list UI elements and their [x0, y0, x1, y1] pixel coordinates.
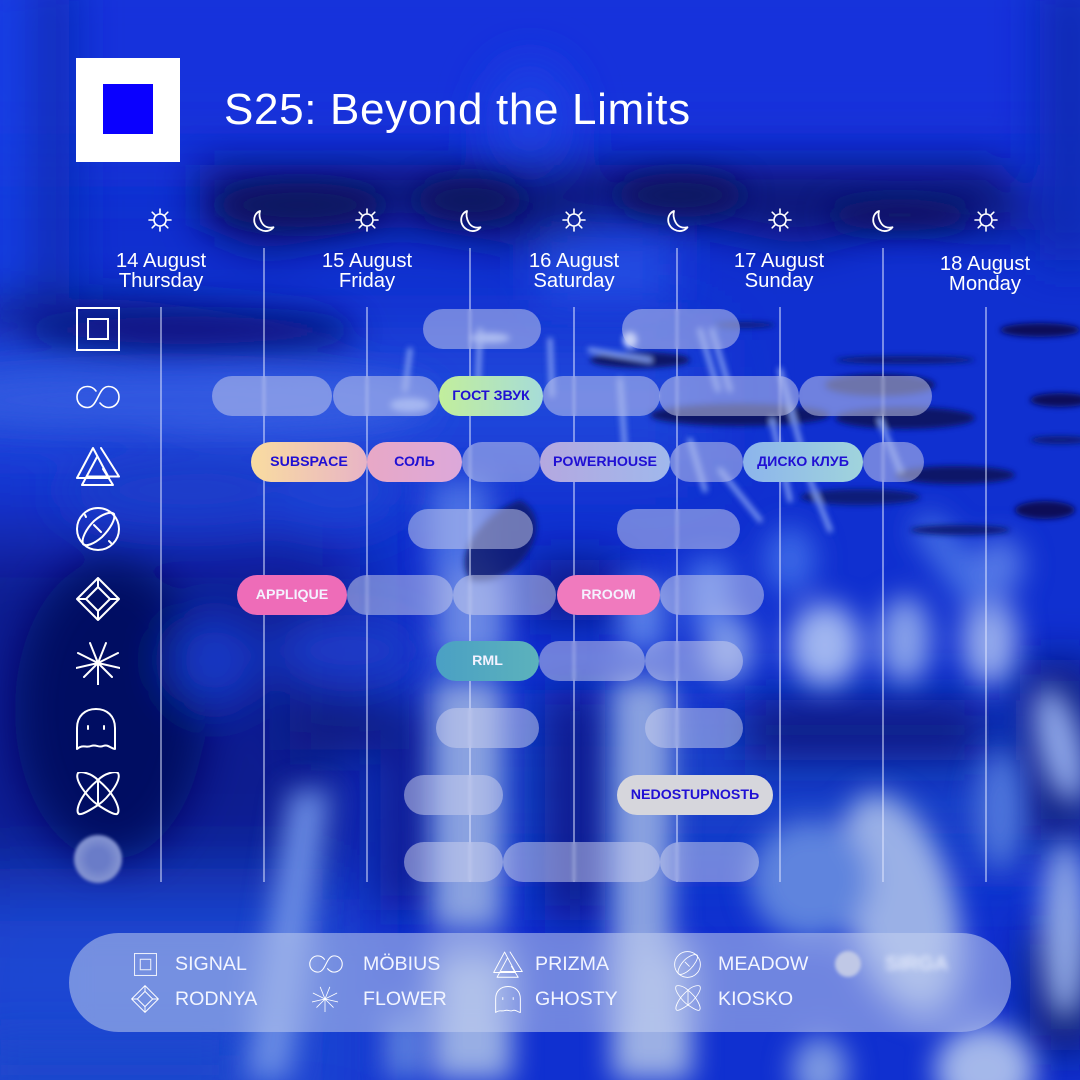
- session: RML: RML: [472, 653, 503, 669]
- legend label: RODNYA: RODNYA: [175, 988, 257, 1010]
- date: 17 August Sunday: 17 August: [734, 250, 824, 272]
- session: APPLIQUE: APPLIQUE: [256, 587, 328, 603]
- row 1 sessions: Signal: [423, 309, 740, 349]
- empty session: [408, 509, 533, 549]
- legend icon: Meadow: [674, 951, 701, 978]
- day and night icons row: [148, 208, 998, 232]
- title: S25: Beyond the Limits: [224, 85, 691, 134]
- icon: sun: [562, 208, 586, 232]
- row 9 sessions: blurred stage: [404, 842, 759, 882]
- legend label: blurred name: SIRGA: [885, 953, 948, 975]
- row icon: Kiosko: [76, 772, 120, 816]
- date: 18 August Monday: 18 August: [940, 253, 1030, 275]
- session: APPLIQUE: [237, 575, 347, 615]
- legend icon: Flower: [312, 986, 338, 1012]
- empty session: [404, 842, 503, 882]
- session: NEDOSTUPNOSTЬ: [617, 775, 773, 815]
- legend icon: Ghosty: [495, 985, 521, 1014]
- icon: moon: [872, 210, 894, 232]
- legend panel: [69, 933, 1011, 1032]
- icon: moon: [667, 210, 688, 232]
- legend icon: Möbius: [309, 955, 343, 973]
- icon: sun: [974, 208, 998, 232]
- empty session: [423, 309, 541, 349]
- row icon: Flower: [76, 642, 120, 685]
- row icon: blurred placeholder circle: [74, 835, 122, 883]
- empty session: [659, 376, 799, 416]
- row 6 sessions: Flower: [436, 641, 743, 681]
- legend icon: Rodnya: [131, 985, 159, 1013]
- session: SUBSPACE: SUBSPACE: [270, 454, 348, 470]
- empty session: [436, 708, 539, 748]
- empty session: [404, 775, 503, 815]
- date: 15 August Friday: 15 August: [322, 250, 412, 272]
- empty session: [617, 509, 740, 549]
- legend icon: Prizma: [493, 952, 523, 978]
- empty session: [503, 842, 660, 882]
- icon: moon: [460, 210, 482, 232]
- date: 16 August Saturday: Saturday: [533, 270, 615, 292]
- session: ГОСТ ЗВУК: ГОСТ ЗВУК: [452, 388, 530, 404]
- row icon: Signal: [76, 307, 120, 351]
- empty session: [670, 442, 743, 482]
- session: NEDOSTUPNOSTЬ: NEDOSTUPNOSTЬ: [631, 787, 759, 803]
- legend icon: Kiosko: [675, 985, 701, 1012]
- session: RROOM: [557, 575, 660, 615]
- icon: moon: [253, 210, 274, 232]
- session: ДИСКО КЛУБ: ДИСКО КЛУБ: [757, 454, 849, 470]
- legend label: FLOWER: FLOWER: [363, 988, 447, 1010]
- row icon: Rodnya: [76, 577, 120, 621]
- row 4 sessions: Meadow: [408, 509, 740, 549]
- session: ДИСКО КЛУБ: [743, 442, 863, 482]
- session: POWERHOUSE: [540, 442, 670, 482]
- legend label: SIGNAL: SIGNAL: [175, 953, 247, 975]
- empty session: [212, 376, 332, 416]
- date: 14 August Thursday: Thursday: [119, 270, 203, 292]
- row 5 sessions: Rodnya: [237, 575, 764, 615]
- row icon: Meadow: [76, 507, 120, 551]
- empty session: [622, 309, 740, 349]
- icon: sun: [355, 208, 379, 232]
- legend icon: blurred circle: [835, 951, 861, 977]
- empty session: [645, 641, 743, 681]
- empty session: [347, 575, 453, 615]
- empty session: [539, 641, 645, 681]
- date: 16 August Saturday: [529, 250, 619, 292]
- date: 16 August Saturday: 16 August: [529, 250, 619, 272]
- legend label: GHOSTY: GHOSTY: [535, 988, 618, 1010]
- date: 14 August Thursday: 14 August: [116, 250, 206, 272]
- row icon: Prizma: [76, 447, 120, 486]
- legend label: MÖBIUS: MÖBIUS: [363, 953, 440, 975]
- empty session: [660, 575, 764, 615]
- empty session: [645, 708, 743, 748]
- empty session: [453, 575, 556, 615]
- empty session: [543, 376, 660, 416]
- date: 14 August Thursday: [116, 250, 206, 292]
- row 2 sessions: Möbius: [212, 376, 932, 416]
- session: ГОСТ ЗВУК: [439, 376, 543, 416]
- empty session: [799, 376, 932, 416]
- date: 15 August Friday: Friday: [339, 270, 395, 292]
- session: SUBSPACE: [251, 442, 367, 482]
- session: POWERHOUSE: POWERHOUSE: [553, 454, 657, 470]
- row 3 sessions: Prizma: [251, 442, 924, 482]
- empty session: [333, 376, 439, 416]
- icon: sun: [148, 208, 172, 232]
- date: 18 August Monday: Monday: [949, 273, 1021, 295]
- empty session: [462, 442, 540, 482]
- date: 18 August Monday: [940, 253, 1030, 295]
- empty session: [660, 842, 759, 882]
- legend label: MEADOW: MEADOW: [718, 953, 808, 975]
- session: СОЛЬ: СОЛЬ: [394, 454, 435, 470]
- session: RROOM: RROOM: [581, 587, 636, 603]
- session: RML: [436, 641, 539, 681]
- empty session: [863, 442, 924, 482]
- row icon: Möbius: [76, 386, 120, 408]
- date: 17 August Sunday: Sunday: [745, 270, 813, 292]
- legend icon: Signal: [134, 953, 157, 976]
- date: 15 August Friday: [322, 250, 412, 292]
- legend label: PRIZMA: PRIZMA: [535, 953, 609, 975]
- row 7 sessions: Ghosty: [436, 708, 743, 748]
- row icon: Ghosty: [76, 708, 116, 750]
- row 8 sessions: Kiosko: [404, 775, 773, 815]
- date: 17 August Sunday: [734, 250, 824, 292]
- legend label: KIOSKO: KIOSKO: [718, 988, 793, 1010]
- icon: sun: [768, 208, 792, 232]
- session: СОЛЬ: [367, 442, 462, 482]
- logo: white square with blue square: [76, 58, 180, 162]
